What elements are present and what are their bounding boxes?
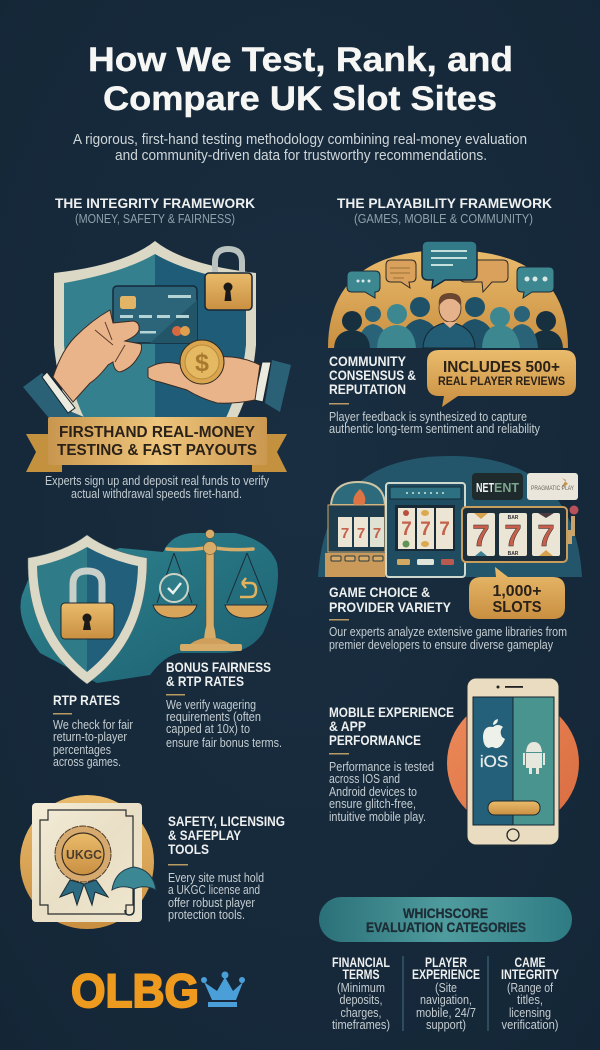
column: financial terms: FINANCIAL	[332, 954, 390, 970]
icon: apple	[483, 719, 505, 748]
column: game integrity: CAME	[514, 954, 546, 970]
text: safety, licensing: TOOLS	[168, 841, 209, 857]
icon: padlock	[205, 249, 252, 310]
text: safety, licensing: Every site must hold	[168, 871, 264, 885]
callout: includes 500+ reviews: INCLUDES 500+	[443, 359, 560, 376]
text: RTP rates: We check for fair	[53, 718, 133, 732]
icon: android	[523, 742, 545, 774]
dome	[318, 456, 582, 577]
text: game choice heading: GAME CHOICE &	[329, 584, 430, 600]
logo: NetEnt: ENT	[494, 480, 519, 495]
banner: firsthand real-money testing	[26, 417, 287, 472]
text: RTP rates: RTP RATES	[53, 692, 120, 708]
text: community consensus heading: CONSENSUS &	[329, 367, 416, 383]
text: mobile experience: MOBILE EXPERIENCE	[329, 704, 454, 720]
large reels: 7	[472, 518, 490, 553]
text: RTP rates: return-to-player	[53, 730, 127, 744]
intro text	[73, 132, 527, 164]
panel: slot machines illustration	[318, 456, 582, 577]
panel: phone illustration	[447, 678, 579, 845]
text: safety, licensing: offer robust player	[168, 896, 255, 910]
large reels: 7	[504, 518, 522, 553]
panel: RTP and bonus illustration	[20, 530, 278, 684]
icon: umbrella	[112, 867, 156, 915]
icon: right hand with coin	[148, 340, 291, 412]
icon: balance scale	[153, 530, 268, 651]
text: RTP rates	[53, 692, 133, 769]
icon: shield	[54, 241, 256, 422]
text: mobile experience: Android devices to	[329, 785, 417, 799]
text: experts description	[45, 474, 270, 501]
column: game integrity: licensing	[509, 1006, 551, 1020]
column: player experience: mobile, 24/7	[416, 1006, 476, 1020]
left slot machine	[325, 482, 385, 577]
heading: integrity framework: THE INTEGRITY FRAMEWORK	[55, 195, 255, 211]
callout: 1,000+ slots: 1,000+	[492, 583, 542, 600]
icon: left hand holding card	[23, 310, 142, 417]
heading: integrity framework	[55, 195, 255, 226]
text: safety, licensing: & SAFEPLAY	[168, 827, 242, 843]
text: mobile experience: across IOS and	[329, 772, 400, 786]
left slot machine: 7	[357, 525, 365, 542]
text: mobile experience: PERFORMANCE	[329, 732, 421, 748]
speech bubbles	[347, 241, 554, 298]
logo: NetEnt	[472, 473, 523, 500]
text: mobile experience: intuitive mobile play.	[329, 810, 426, 824]
crowd silhouettes	[334, 297, 563, 348]
large reels: 7	[537, 518, 555, 553]
text: mobile experience: Performance is tested	[329, 760, 434, 774]
teal blob	[20, 533, 278, 683]
lever	[565, 506, 578, 544]
text: bonus fairness: requirements (often	[166, 710, 261, 724]
gold dome	[328, 250, 568, 348]
large reels: BAR	[508, 515, 519, 521]
centre slot machine: 7	[420, 519, 431, 540]
heading: integrity framework: (MONEY, SAFETY & FAIRNESS)	[75, 212, 235, 226]
icon: crown	[201, 972, 245, 1007]
panel: whichscore pill: EVALUATION CATEGORIES	[366, 920, 526, 935]
centre slot machine	[386, 483, 465, 577]
text: mobile experience: ensure glitch-free,	[329, 797, 416, 811]
centre person	[423, 293, 475, 348]
column: financial terms: timeframes)	[332, 1018, 390, 1032]
text: community consensus heading: COMMUNITY	[329, 353, 407, 369]
column: player experience: (Site	[435, 981, 457, 995]
text: bonus fairness: We verify wagering	[166, 698, 256, 712]
gold circle	[20, 795, 154, 929]
left slot machine: 7	[341, 525, 349, 542]
callout: includes 500+ reviews: REAL PLAYER REVIEWS	[438, 374, 565, 388]
text: community description	[329, 410, 541, 436]
heading: playability framework	[337, 195, 552, 226]
text: community consensus heading: REPUTATION	[329, 381, 406, 397]
text: safety, licensing: protection tools.	[168, 908, 245, 922]
column: player experience: navigation,	[420, 993, 472, 1007]
panel: UKGC certificate illustration	[20, 795, 156, 929]
logo: Pragmatic Play	[527, 473, 578, 500]
banner: firsthand real-money testing: TESTING & FAST PAYOUTS	[57, 442, 257, 459]
orange circle	[447, 697, 579, 829]
icon: right hand with coin: $	[195, 349, 209, 377]
title: Compare UK Slot Sites	[103, 80, 497, 118]
text: mobile experience: & APP	[329, 718, 366, 734]
column: player experience: PLAYER	[425, 954, 467, 970]
text: community description: Player feedback is synthesized to capture	[329, 410, 527, 424]
icon: bank card	[113, 286, 197, 343]
callout: includes 500+ reviews	[427, 350, 576, 407]
text: RTP rates: across games.	[53, 755, 121, 769]
intro text: and community-driven data for trustworthy recommendations.	[115, 148, 487, 164]
text: community description: authentic long-term sentiment and reliability	[329, 422, 541, 436]
column: financial terms	[332, 954, 390, 1032]
panel: whichscore pill: WHICHSCORE	[403, 906, 488, 921]
callout: 1,000+ slots	[469, 567, 565, 619]
text: bonus fairness	[166, 659, 282, 750]
text: bonus fairness: BONUS FAIRNESS	[166, 659, 271, 675]
column: player experience	[412, 954, 480, 1032]
phone	[467, 678, 559, 845]
button	[488, 801, 540, 815]
heading: playability framework: THE PLAYABILITY FRAMEWORK	[337, 195, 552, 211]
text: safety, licensing: SAFETY, LICENSING	[168, 813, 285, 829]
text: safety, licensing: a UKGC license and	[168, 883, 260, 897]
large reels: BAR	[508, 551, 519, 557]
text: game choice description: Our experts analyze extensive game libraries from	[329, 625, 567, 639]
logo: OLBG with crown: OLBG	[71, 964, 199, 1017]
panel: firsthand real-money testing illustration	[23, 241, 291, 422]
text: mobile experience	[329, 704, 454, 824]
text: safety, licensing	[168, 813, 285, 922]
text: game choice heading: PROVIDER VARIETY	[329, 599, 452, 615]
title: How We Test, Rank, and	[88, 41, 513, 79]
text: bonus fairness: & RTP RATES	[166, 673, 244, 689]
left slot machine: 7	[373, 525, 381, 542]
column: game integrity: (Range of	[507, 981, 553, 995]
column: game integrity: titles,	[517, 993, 543, 1007]
title	[88, 41, 513, 118]
text: experts description: actual withdrawal speeds firet-hand.	[71, 487, 242, 501]
column: player experience: EXPERIENCE	[412, 966, 480, 982]
text: bonus fairness: ensure fair bonus terms.	[166, 736, 282, 750]
column: financial terms: deposits,	[340, 993, 382, 1007]
logo: NetEnt: NET	[476, 480, 494, 495]
text: RTP rates: percentages	[53, 743, 111, 757]
centre slot machine: 7	[439, 519, 450, 540]
certificate: UKGC	[66, 847, 103, 862]
text: game choice description	[329, 625, 567, 652]
icon: shield with padlock	[28, 535, 147, 684]
text: experts description: Experts sign up and deposit real funds to verify	[45, 474, 270, 488]
column: player experience: support)	[426, 1018, 466, 1032]
panel: community illustration	[328, 241, 568, 348]
centre slot machine: 7	[401, 519, 412, 540]
logo: Pragmatic Play: PRAGMATIC PLAY	[531, 486, 574, 492]
text: game choice heading	[329, 584, 452, 620]
intro text: A rigorous, first-hand testing methodology combining real-money evaluation	[73, 132, 527, 148]
large reels	[462, 507, 567, 562]
iOS label: iOS	[480, 752, 508, 771]
heading: playability framework: (GAMES, MOBILE & COMMUNITY)	[354, 212, 533, 226]
text: bonus fairness: capped at 10x) to	[166, 722, 250, 736]
panel: whichscore pill	[319, 897, 572, 942]
column: game integrity: INTEGRITY	[501, 966, 560, 982]
column: game integrity	[501, 954, 560, 1032]
column: financial terms: charges,	[340, 1006, 382, 1020]
text: community consensus heading	[329, 353, 416, 404]
callout: 1,000+ slots: SLOTS	[492, 599, 542, 616]
banner: firsthand real-money testing: FIRSTHAND REAL-MONEY	[59, 424, 256, 441]
column: financial terms: TERMS	[342, 966, 380, 982]
column: game integrity: verification)	[502, 1018, 558, 1032]
text: game choice description: premier developers to ensure diverse gameplay	[329, 638, 554, 652]
column: financial terms: (Minimum	[337, 981, 385, 995]
